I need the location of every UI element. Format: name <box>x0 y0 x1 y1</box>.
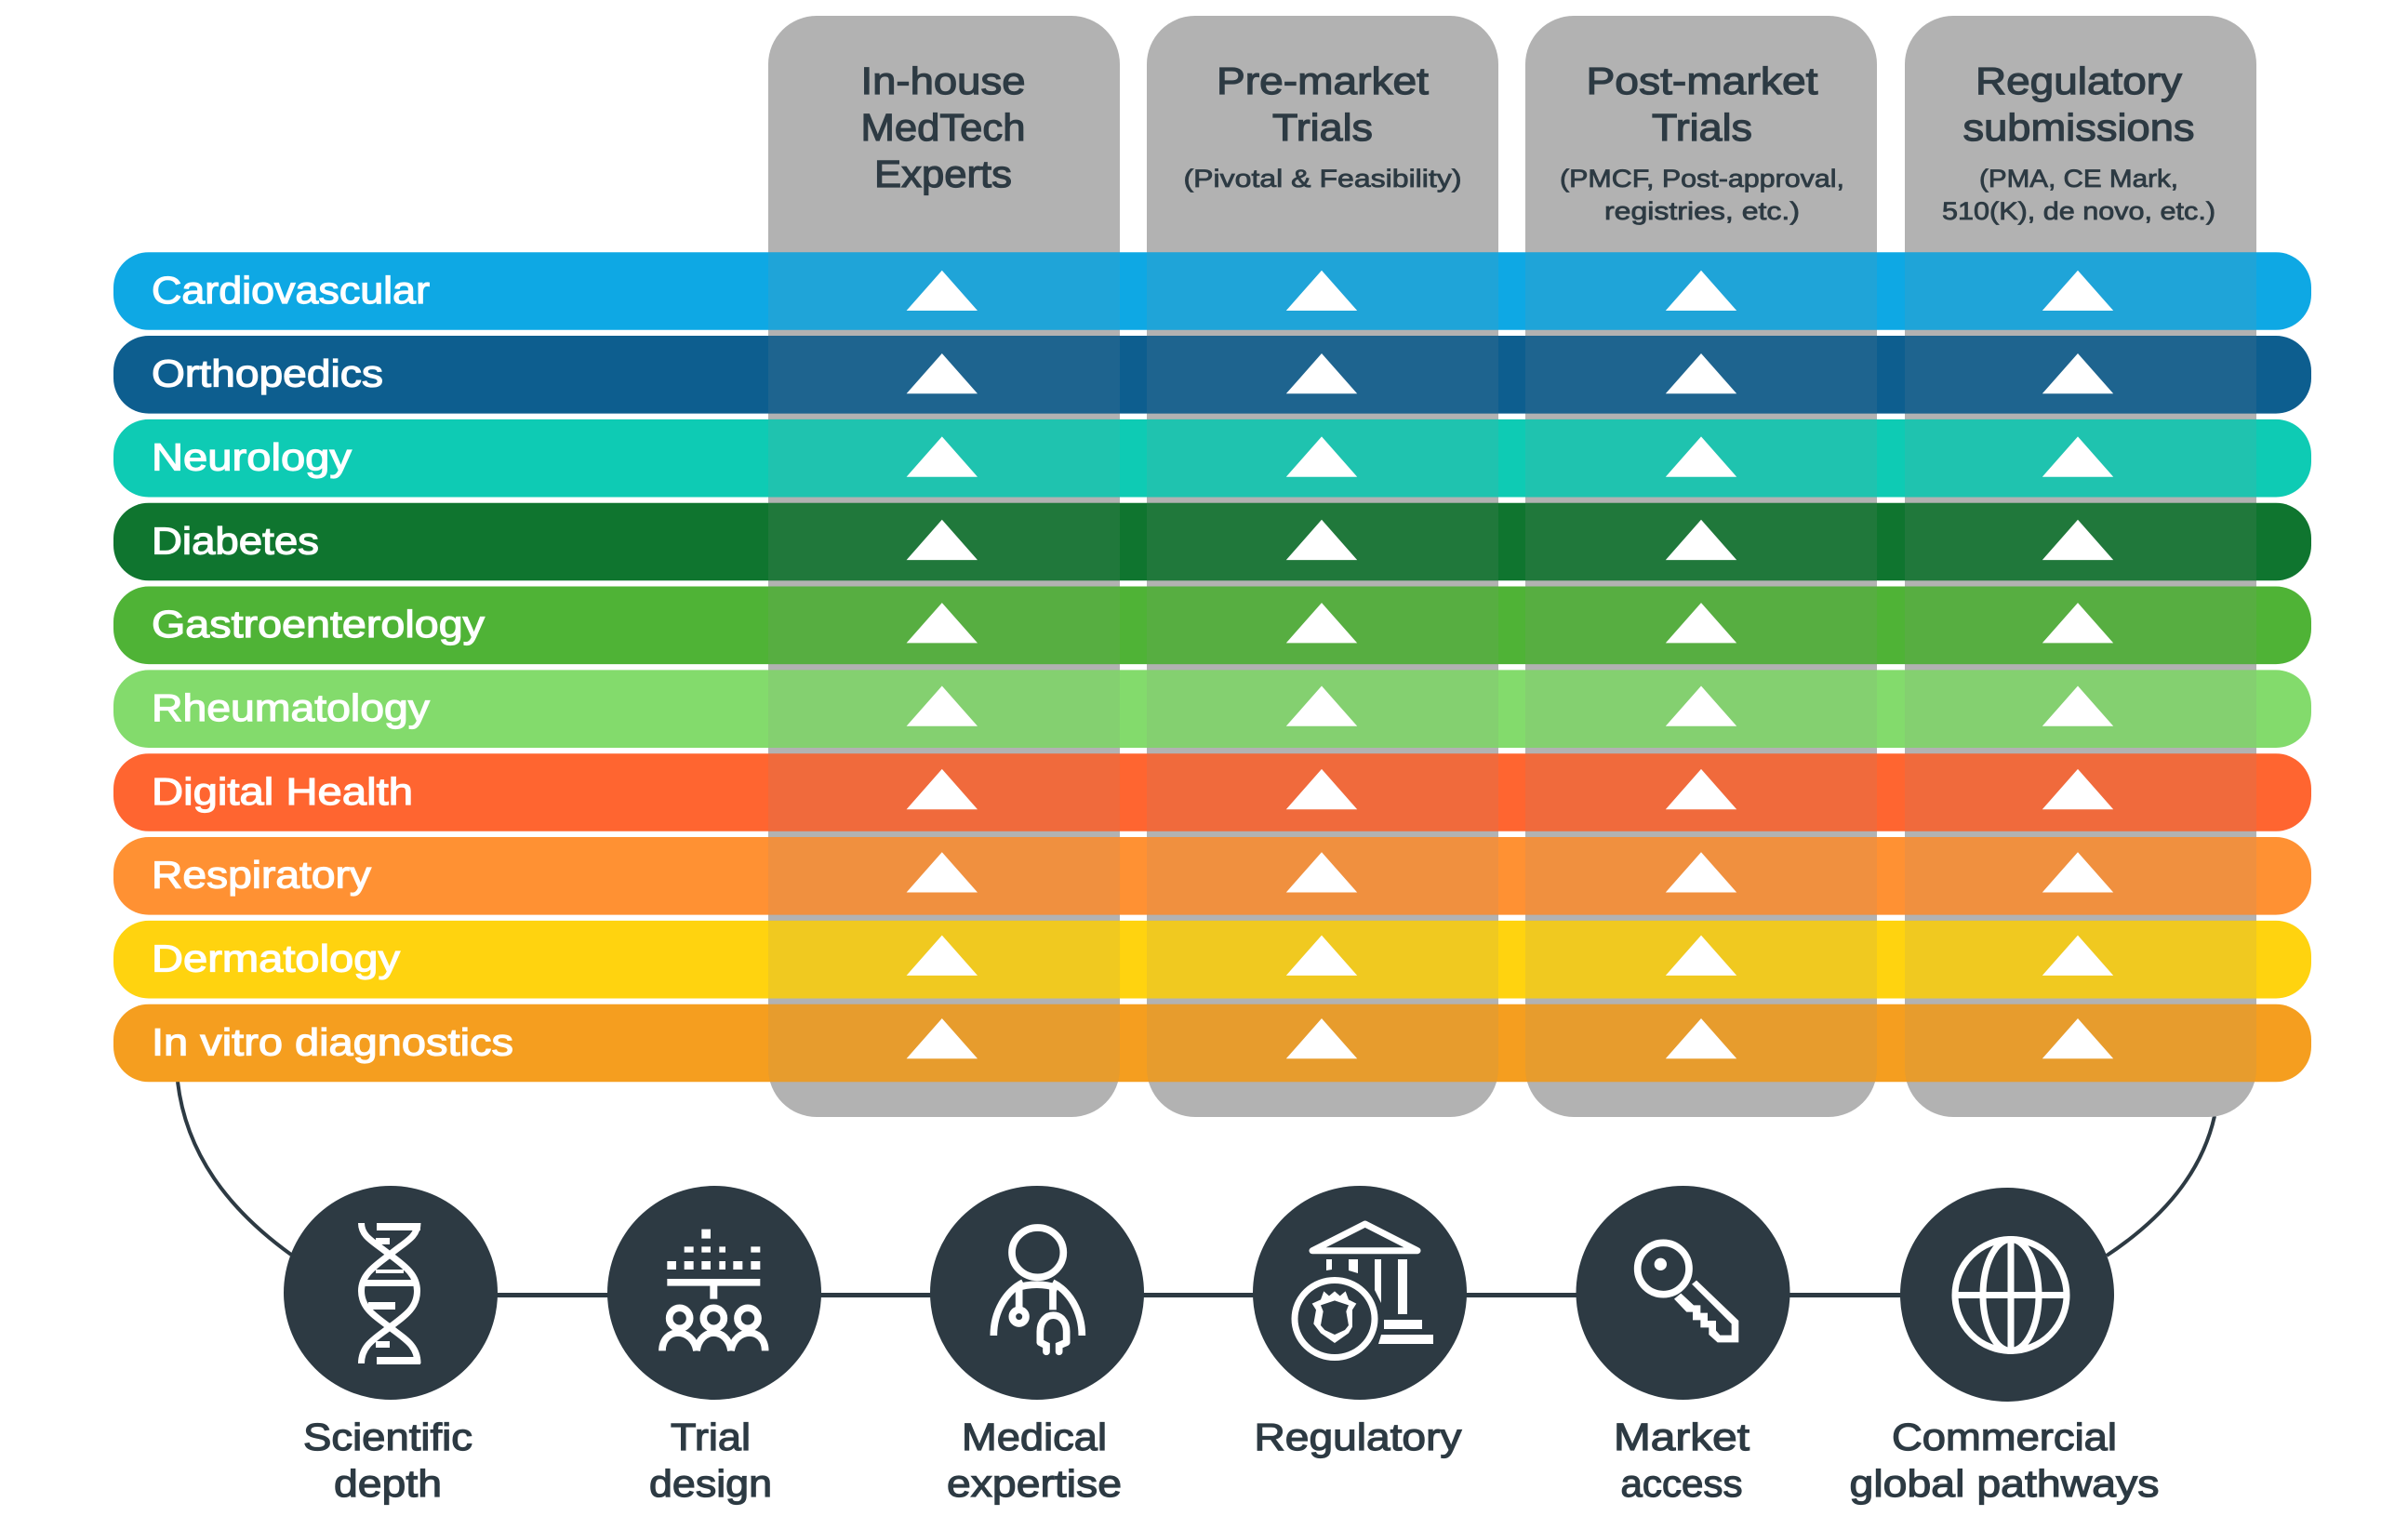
connector: right curve <box>2107 1116 2215 1256</box>
column: Regulatory submissions: Regulatory <box>1976 60 2183 102</box>
column: Pre-market Trials: Pre-market <box>1217 60 1430 102</box>
label: Scientific depth: Scientific <box>303 1416 472 1458</box>
column: Post-market Trials: (PMCF, Post-approval, <box>1560 165 1844 193</box>
column tint overlays <box>768 253 2256 1082</box>
column: In-house MedTech Experts: MedTech <box>861 106 1025 149</box>
band: Respiratory <box>113 837 2311 915</box>
band: Digital Health <box>113 753 2311 831</box>
column: Post-market Trials: registries, etc.) <box>1604 197 1800 225</box>
label: Medical expertise: expertise <box>947 1462 1122 1505</box>
label: Medical expertise: Medical <box>962 1416 1107 1458</box>
label: Trial design <box>649 1416 772 1505</box>
band: Neurology <box>113 419 2311 497</box>
column: Pre-market Trials: (Pivotal & Feasibility) <box>1183 165 1462 193</box>
label: Market access: Market <box>1614 1416 1750 1458</box>
column: Regulatory submissions: (PMA, CE Mark, <box>1979 165 2178 193</box>
column: In-house MedTech Experts <box>768 16 1120 1117</box>
column: Pre-market Trials: Trials <box>1272 106 1373 149</box>
band: In vitro diagnostics <box>113 1004 2311 1082</box>
label: Commercial global pathways <box>1849 1416 2160 1505</box>
band: Dermatology <box>113 921 2311 999</box>
column: Regulatory submissions: submissions <box>1962 106 2195 149</box>
label: Commercial global pathways: Commercial <box>1892 1416 2117 1458</box>
band: Cardiovascular: Cardiovascular <box>152 269 430 312</box>
band: In vitro diagnostics: In vitro diagnostics <box>152 1020 513 1063</box>
band: Respiratory: Respiratory <box>152 854 372 897</box>
band: Diabetes: Diabetes <box>152 519 319 562</box>
column: In-house MedTech Experts: In-house <box>861 60 1025 102</box>
icon: regulatory building and badge <box>1253 1186 1467 1400</box>
band: Digital Health: Digital Health <box>152 770 413 813</box>
band: Rheumatology: Rheumatology <box>152 686 431 729</box>
label: Scientific depth <box>303 1416 472 1505</box>
icon: globe <box>1900 1188 2114 1402</box>
label: Commercial global pathways: global pathways <box>1849 1462 2160 1505</box>
label: Regulatory: Regulatory <box>1254 1416 1462 1458</box>
icon: DNA <box>284 1186 498 1400</box>
icon: trial design <box>607 1186 821 1400</box>
band: Dermatology: Dermatology <box>152 938 401 980</box>
band: Gastroenterology: Gastroenterology <box>152 603 486 645</box>
band: Gastroenterology <box>113 586 2311 664</box>
label: Trial design: Trial <box>671 1416 751 1458</box>
band: Orthopedics <box>113 336 2311 414</box>
label: Trial design: design <box>649 1462 772 1505</box>
column: Regulatory submissions: 510(K), de novo, etc.) <box>1942 197 2215 225</box>
column: Post-market Trials: Post-market <box>1587 60 1818 102</box>
connector: horizontal line <box>391 1293 2007 1297</box>
column: Post-market Trials: Trials <box>1652 106 1752 149</box>
connector: left curve <box>178 1082 291 1255</box>
band: Diabetes <box>113 503 2311 580</box>
band: Neurology: Neurology <box>152 436 353 479</box>
column: Post-market Trials <box>1525 16 1877 1117</box>
band: Rheumatology <box>113 670 2311 748</box>
label: Market access: access <box>1620 1462 1743 1505</box>
triangle markers <box>907 271 2113 1058</box>
icon: key <box>1576 1186 1789 1400</box>
label: Medical expertise <box>947 1416 1122 1505</box>
icon: doctor with stethoscope <box>930 1186 1144 1400</box>
label: Market access <box>1614 1416 1750 1505</box>
column: Pre-market Trials <box>1147 16 1498 1117</box>
column: Regulatory submissions <box>1905 16 2256 1117</box>
band: Orthopedics: Orthopedics <box>152 352 383 395</box>
band: Cardiovascular <box>113 252 2311 330</box>
label: Scientific depth: depth <box>334 1462 442 1505</box>
column: In-house MedTech Experts: Experts <box>874 153 1012 195</box>
